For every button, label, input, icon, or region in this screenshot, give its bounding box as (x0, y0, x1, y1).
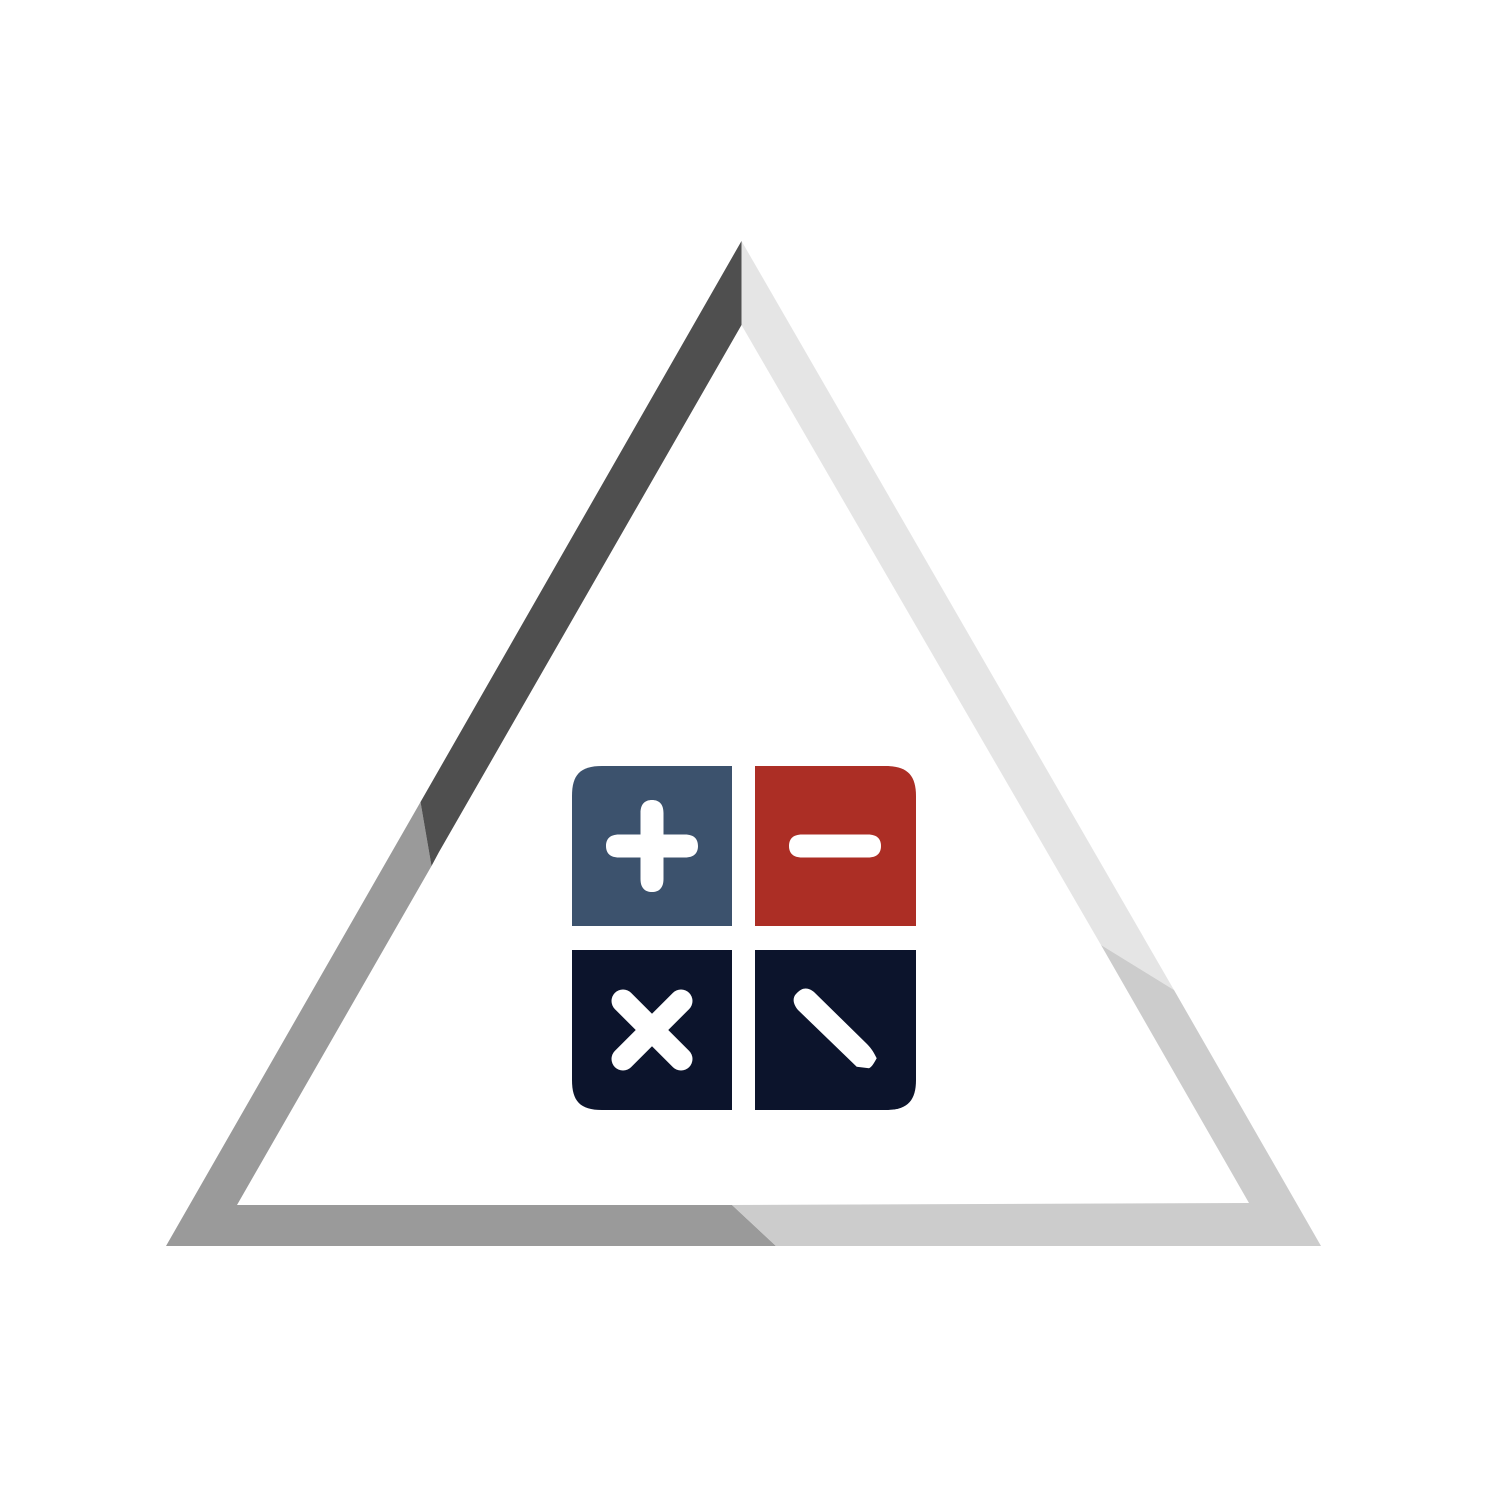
key: multiply (572, 950, 732, 1110)
key: minus (755, 766, 916, 926)
key: divide (755, 950, 916, 1110)
triangle frame (166, 241, 1321, 1246)
frame segment: upper left dark (420, 241, 742, 866)
key: plus (572, 766, 732, 926)
frame segment: upper right light (742, 241, 1174, 990)
frame segment: lower right and bottom right (732, 945, 1321, 1246)
calculator icon (572, 766, 916, 1110)
frame segment: left lower and bottom left (166, 802, 776, 1246)
